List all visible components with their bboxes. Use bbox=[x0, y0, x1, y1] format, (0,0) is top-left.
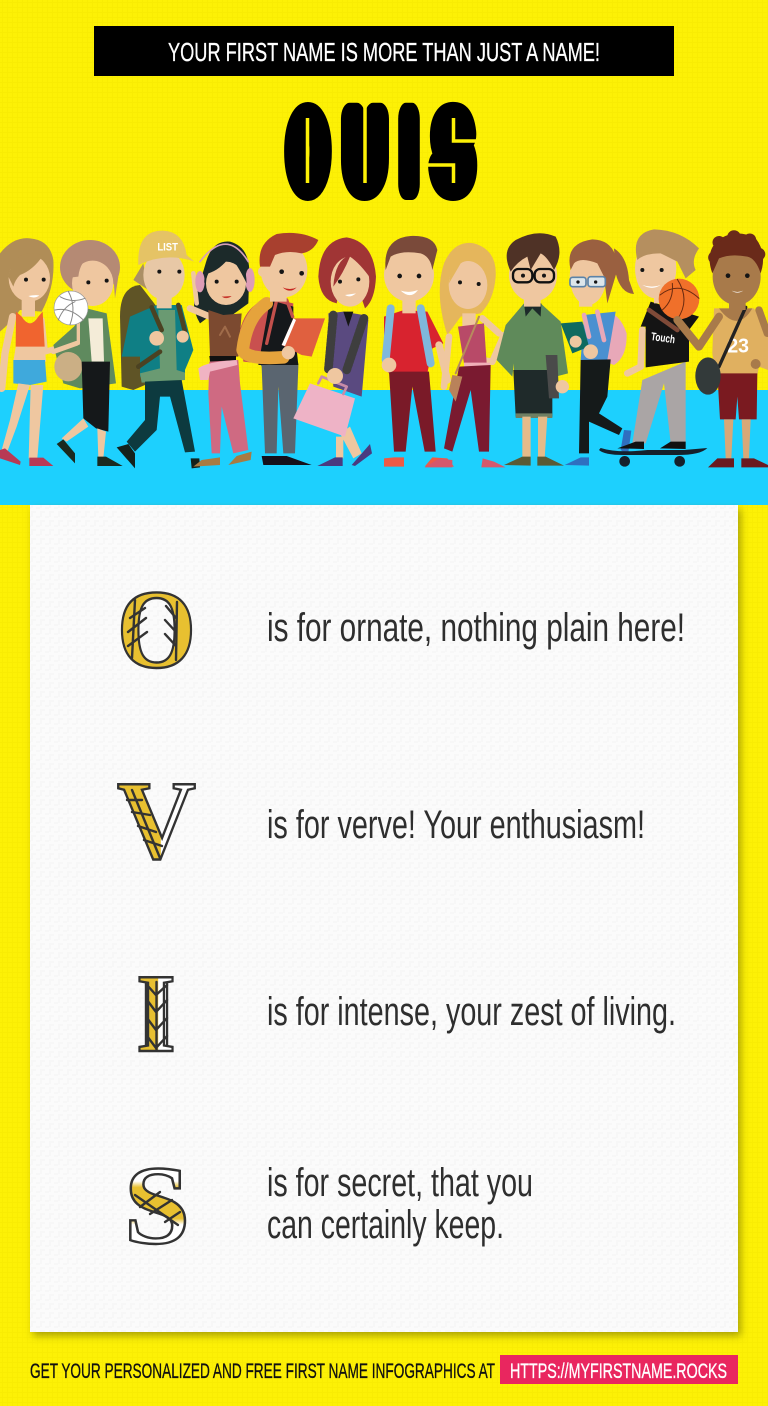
person: boy with book bbox=[240, 233, 325, 465]
cyan floor band bbox=[0, 390, 768, 505]
footer call to action: GET YOUR PERSONALIZED AND FREE FIRST NAME INFOGRAPHICS AT bbox=[30, 1360, 495, 1383]
text: letter S lines: can certainly keep. bbox=[267, 1203, 504, 1247]
top banner bbox=[94, 26, 674, 76]
group of cartoon people, left half bbox=[0, 231, 376, 468]
footer url badge bbox=[500, 1355, 738, 1384]
name title: I bbox=[403, 99, 415, 205]
person: boy in jersey with bag: 23 bbox=[727, 335, 749, 358]
person: boy in jersey with bag bbox=[677, 230, 768, 467]
person: blonde girl bbox=[425, 243, 506, 467]
name title: O bbox=[290, 99, 326, 205]
top banner: YOUR FIRST NAME IS MORE THAN JUST A NAME! bbox=[168, 37, 600, 67]
person: boy on skateboard with basketball: Touch bbox=[650, 331, 676, 346]
letter S decorated: S bbox=[124, 1144, 190, 1268]
group of cartoon people, right half bbox=[382, 229, 768, 467]
person: boy on skateboard with basketball bbox=[599, 229, 707, 467]
person: boy in green sweater with glasses bbox=[497, 233, 569, 466]
person: girl with tablet and ponytail bbox=[561, 239, 634, 466]
text: letter S lines bbox=[267, 1161, 533, 1247]
name title: S bbox=[436, 99, 470, 205]
name title bbox=[290, 99, 478, 205]
person: girl with pink bag bbox=[293, 237, 376, 466]
letter V decorated: V bbox=[117, 759, 196, 883]
person: boy in red shirt bbox=[382, 236, 454, 467]
panel: white name meaning card bbox=[30, 505, 738, 1332]
letter I decorated: I bbox=[136, 952, 176, 1076]
person: girl in orange top bbox=[0, 238, 73, 466]
person: boy with backpack and cap: LIST bbox=[157, 242, 178, 254]
letter O decorated: O bbox=[117, 568, 196, 692]
person: girl with volleyball bbox=[53, 240, 123, 466]
name title: U bbox=[346, 99, 384, 205]
person: girl with headphones bbox=[190, 242, 255, 467]
person: boy with backpack and cap bbox=[117, 231, 200, 468]
text: letter S lines: is for secret, that you bbox=[267, 1161, 533, 1205]
